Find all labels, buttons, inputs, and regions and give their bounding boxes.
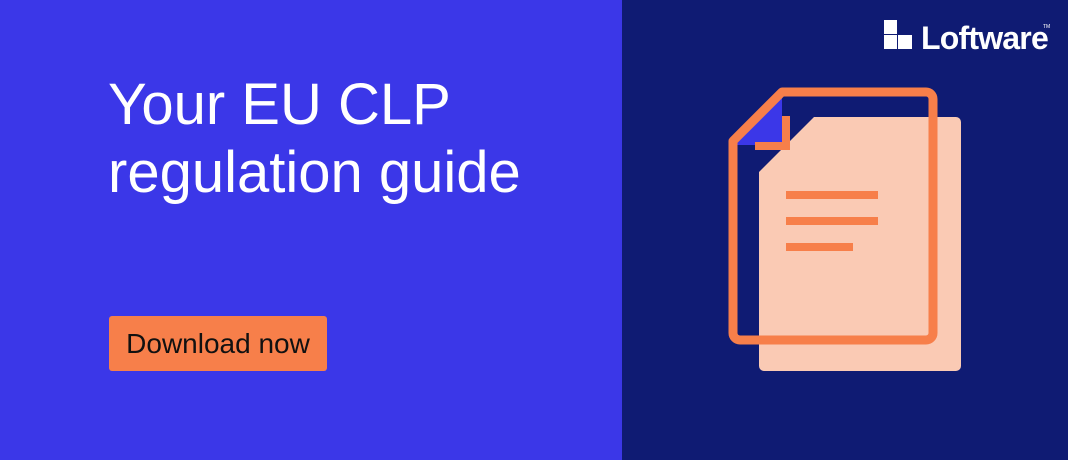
title <box>108 72 521 205</box>
button: download now: Download now <box>126 328 310 359</box>
panel: left blue <box>0 0 622 460</box>
button: download now <box>109 316 327 371</box>
logo: Loftware: TM <box>1043 24 1050 30</box>
panel: right navy <box>622 0 1068 460</box>
front document outline <box>733 92 933 340</box>
back document <box>759 117 961 371</box>
corner fold fill <box>737 96 782 145</box>
title: Your EU CLP <box>108 72 451 137</box>
text lines <box>786 191 878 251</box>
fold mark <box>755 116 786 146</box>
title: regulation guide <box>108 140 521 205</box>
